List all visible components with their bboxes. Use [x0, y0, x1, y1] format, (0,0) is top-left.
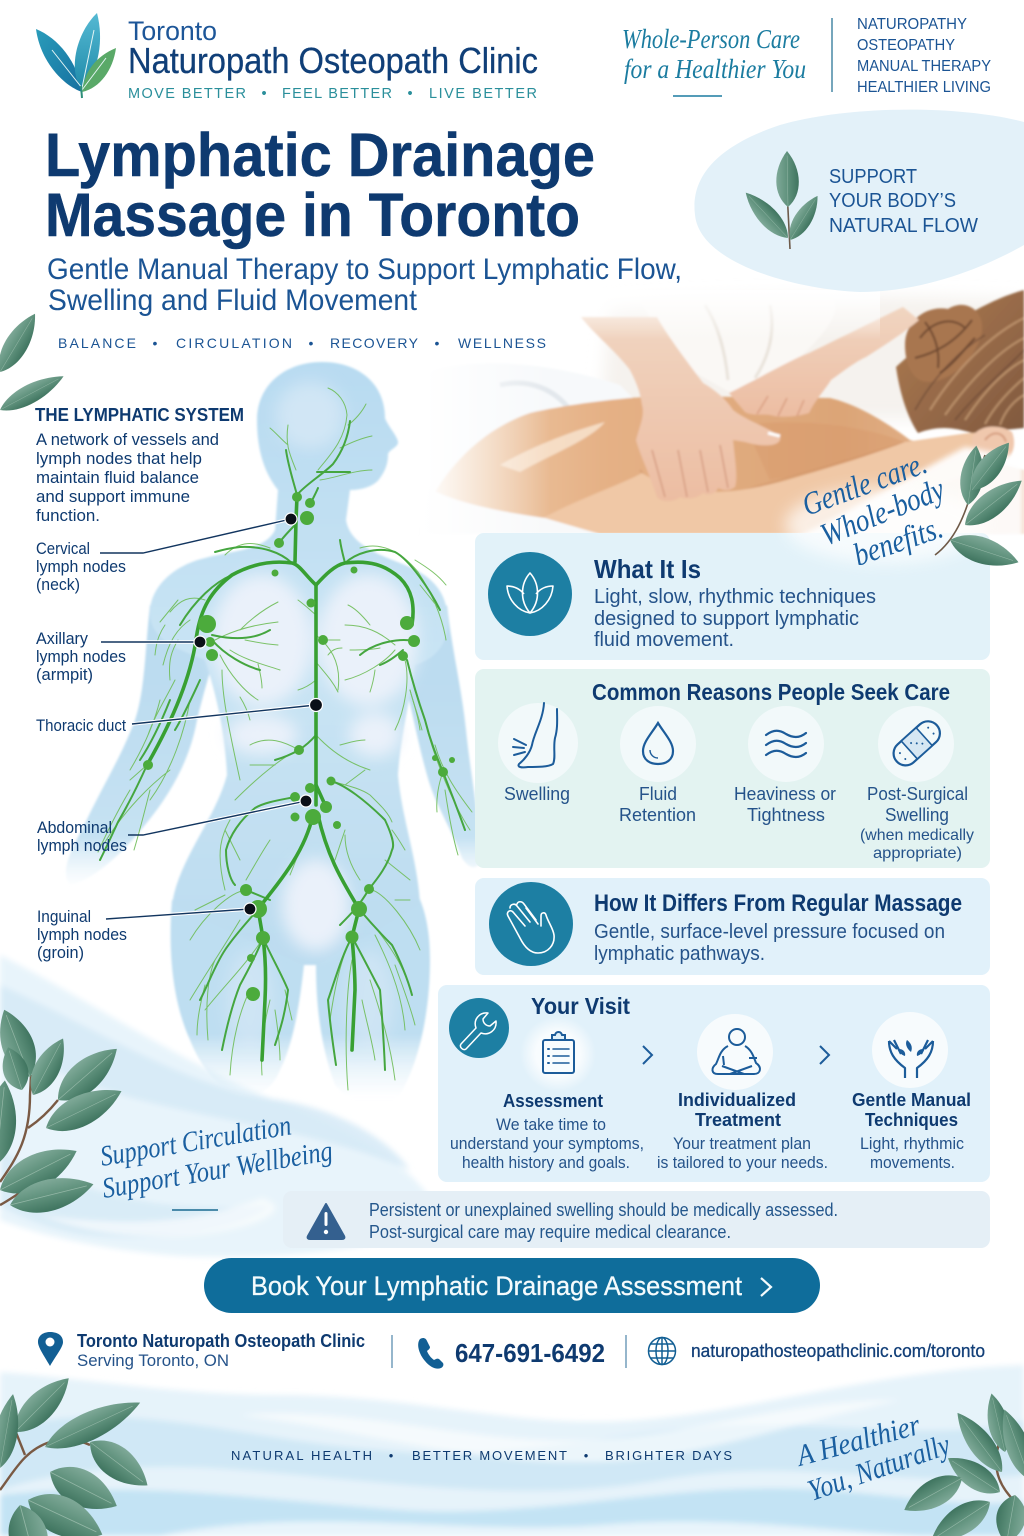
title: Massage in Toronto [45, 181, 580, 249]
keyword strip: CIRCULATION [176, 335, 292, 351]
lymphatic system intro: maintain fluid balance [36, 468, 199, 487]
panel: what it is [475, 533, 990, 660]
icon: bandage [878, 706, 954, 782]
heading: Your Visit [531, 993, 630, 1019]
top-left leaves [0, 308, 68, 418]
label: inguinal [37, 908, 127, 962]
panel: how it differs [475, 878, 990, 975]
label: abdominal: Abdominal [37, 819, 112, 837]
background wave: lower left [0, 955, 440, 1257]
label: cervical: Cervical [36, 540, 90, 558]
logo [36, 13, 538, 102]
arrow [820, 1046, 829, 1064]
body text [594, 586, 876, 651]
label: post-surgical: Post-Surgical [867, 783, 968, 804]
script text: Gentle care. [797, 444, 932, 523]
illustration: footer left leaves [0, 1368, 157, 1536]
illustration: lower-left leaf branch [0, 1004, 128, 1220]
header tagline script [622, 24, 806, 96]
keyword strip: BALANCE [58, 335, 136, 351]
caution text: Persistent or unexplained swelling should be medically assessed. [369, 1200, 838, 1220]
button: book assessment: Book Your Lymphatic Drainage Assessment [251, 1271, 742, 1301]
label: axillary: lymph nodes [36, 648, 126, 666]
title [45, 121, 595, 249]
contact: address: Serving Toronto, ON [77, 1352, 229, 1370]
callout dots [194, 513, 322, 915]
keyword strip: • [153, 335, 158, 351]
label: thoracic duct: Thoracic duct [36, 717, 126, 735]
script callout: a healthier you: A Healthier [792, 1408, 924, 1473]
icon: foot swelling [498, 703, 578, 783]
keyword strip: • [435, 335, 440, 351]
clinic city: Toronto [128, 16, 217, 46]
label: fluid retention: Retention [619, 804, 696, 825]
icon: clipboard [520, 1016, 596, 1092]
label: cervical: lymph nodes [36, 558, 126, 576]
contact: website: naturopathosteopathclinic.com/toronto [691, 1341, 985, 1361]
logo tagline [128, 86, 537, 102]
step: assessment [450, 1016, 644, 1172]
logo tagline: FEEL BETTER [282, 86, 392, 102]
label: axillary [36, 630, 126, 684]
services list: MANUAL THERAPY [857, 58, 991, 75]
step: individualized treatment: Individualized [678, 1090, 796, 1110]
step: gentle manual techniques: Light, rhythmic [860, 1135, 964, 1153]
step: gentle manual techniques: Techniques [865, 1110, 958, 1130]
logo tagline: MOVE BETTER [128, 86, 246, 102]
fine vessels [98, 388, 472, 1090]
keyword strip [58, 335, 546, 351]
step: assessment: Assessment [503, 1091, 603, 1111]
contact: phone: 647-691-6492 [455, 1338, 605, 1368]
panel: medical caution [283, 1191, 990, 1248]
label: cervical: (neck) [36, 576, 80, 594]
callout lines [100, 519, 316, 919]
lymphatic system intro [35, 405, 244, 525]
caution text: Post-surgical care may require medical clearance. [369, 1222, 731, 1242]
body text: lymphatic pathways. [594, 943, 765, 965]
label: fluid retention: Fluid [639, 783, 677, 804]
step: individualized treatment: is tailored to your needs. [657, 1154, 828, 1172]
body text: Gentle, surface-level pressure focused on [594, 921, 945, 943]
script callout: support circulation: Support Circulation [98, 1109, 294, 1173]
patient arm [520, 432, 1000, 534]
lymphatic system intro: THE LYMPHATIC SYSTEM [35, 405, 244, 425]
logo tagline: • [407, 86, 413, 102]
services list: HEALTHIER LIVING [857, 79, 991, 96]
chart: lymphatic system body diagram [66, 362, 482, 1104]
label: cervical [36, 540, 126, 594]
towel [430, 363, 640, 500]
body text: designed to support lymphatic [594, 608, 859, 630]
footer tagline: • [389, 1448, 394, 1463]
label: inguinal: Inguinal [37, 908, 91, 926]
body text [594, 921, 945, 965]
icon: leaf sprig [739, 151, 825, 249]
heading: How It Differs From Regular Massage [594, 890, 962, 917]
label: axillary: Axillary [36, 630, 89, 648]
logo tagline: LIVE BETTER [429, 86, 537, 102]
step: assessment: understand your symptoms, [450, 1135, 644, 1153]
keyword strip: RECOVERY [330, 335, 419, 351]
lymphatic system intro: A network of vessels and [36, 430, 219, 449]
lymphatic system intro: lymph nodes that help [36, 449, 202, 468]
therapist left arm and hand [581, 317, 780, 501]
photo fade overlays [420, 280, 550, 536]
arrow [643, 1046, 652, 1064]
label: abdominal: lymph nodes [37, 837, 127, 855]
icon: waves [748, 706, 824, 782]
body silhouette [66, 362, 482, 1104]
lymph nodes [143, 492, 455, 1001]
label: swelling: Swelling [504, 783, 570, 804]
background waves: footer [0, 1365, 1024, 1536]
body highlights [212, 381, 418, 1050]
step: gentle manual techniques [852, 1012, 971, 1172]
label: post-surgical: appropriate) [873, 845, 962, 862]
hair [896, 290, 1024, 433]
hero photo: massage [420, 280, 1024, 540]
therapist shirt [640, 293, 835, 395]
support badge blob [694, 110, 1024, 292]
script callout: support circulation [98, 1109, 335, 1210]
footer tagline: • [584, 1448, 589, 1463]
step: gentle manual techniques: movements. [870, 1154, 955, 1172]
script callout: support circulation: Support Your Wellbeing [100, 1135, 335, 1205]
footer tagline: NATURAL HEALTH [231, 1448, 372, 1463]
label: heaviness: Tightness [747, 804, 825, 825]
services list [857, 16, 991, 96]
ear [972, 427, 1014, 462]
step: individualized treatment: Treatment [695, 1110, 781, 1130]
keyword strip: • [309, 335, 314, 351]
script text [797, 444, 950, 573]
step: gentle manual techniques: Gentle Manual [852, 1090, 971, 1110]
header tagline script: for a Healthier You [624, 54, 806, 84]
icon: logo leaves [36, 13, 116, 98]
contact: website [648, 1338, 985, 1364]
panel: common reasons [475, 669, 990, 868]
body text: Light, slow, rhythmic techniques [594, 586, 876, 608]
script text: benefits. [849, 509, 947, 573]
footer tagline [231, 1448, 732, 1463]
label: inguinal: lymph nodes [37, 926, 127, 944]
label: post-surgical: (when medically [860, 827, 974, 844]
step: assessment: We take time to [496, 1116, 606, 1134]
heading: What It Is [594, 554, 701, 584]
label: axillary: (armpit) [36, 666, 93, 684]
subtitle [47, 253, 682, 317]
main vessels [147, 497, 413, 1060]
header tagline script: Whole-Person Care [622, 24, 800, 54]
icon: globe [648, 1338, 676, 1364]
step: individualized treatment [657, 1014, 828, 1172]
subtitle: Gentle Manual Therapy to Support Lymphatic Flow, [47, 253, 682, 286]
badge text: NATURAL FLOW [829, 215, 978, 237]
services list: OSTEOPATHY [857, 37, 955, 54]
label: heaviness [734, 783, 836, 825]
icon: lotus [488, 552, 572, 636]
label: abdominal [37, 819, 127, 855]
label: heaviness: Heaviness or [734, 783, 836, 804]
step: assessment: health history and goals. [462, 1154, 630, 1172]
icon: wrench [449, 998, 509, 1058]
icon: map pin [38, 1332, 63, 1366]
studio background [600, 297, 1024, 420]
icon: seated person [697, 1014, 773, 1090]
label: fluid retention [619, 783, 696, 825]
services list: NATUROPATHY [857, 16, 967, 33]
footer tagline: BRIGHTER DAYS [605, 1448, 732, 1463]
contact: address: Toronto Naturopath Osteopath Clinic [77, 1331, 365, 1351]
title: Lymphatic Drainage [45, 121, 595, 189]
panel: your visit [438, 985, 990, 1182]
footer tagline: BETTER MOVEMENT [412, 1448, 567, 1463]
lymphatic system intro: and support immune [36, 487, 190, 506]
script callout: a healthier you: You, Naturally [804, 1428, 955, 1508]
medium vessels [100, 421, 465, 1070]
therapist right arm and hand [729, 307, 919, 417]
button: book assessment [204, 1258, 820, 1313]
clinic name: Naturopath Osteopath Clinic [128, 40, 538, 81]
body text: fluid movement. [594, 629, 734, 651]
icon: leaf branch [935, 436, 1024, 575]
patient back [420, 396, 1024, 534]
label: inguinal: (groin) [37, 944, 84, 962]
badge text: YOUR BODY’S [829, 190, 956, 212]
icon: drop [620, 706, 696, 782]
step: individualized treatment: Your treatment plan [673, 1135, 811, 1153]
script callout: gentle care with leaves [785, 436, 1024, 575]
script text: Whole-body [815, 470, 950, 552]
contact: address [38, 1331, 365, 1370]
icon: phone [418, 1338, 443, 1369]
lymphatic system intro: function. [36, 506, 100, 525]
logo tagline: • [261, 86, 267, 102]
subtitle: Swelling and Fluid Movement [48, 284, 417, 317]
keyword strip: WELLNESS [458, 335, 546, 351]
heading: Common Reasons People Seek Care [592, 679, 950, 705]
badge text: SUPPORT [829, 166, 917, 188]
illustration: footer right leaves [898, 1391, 1024, 1536]
label: post-surgical [860, 783, 974, 862]
icon: hand [489, 882, 573, 966]
icon: warning triangle [308, 1204, 344, 1239]
label: post-surgical: Swelling [885, 804, 949, 825]
icon: hands with leaves [872, 1012, 948, 1088]
badge text [829, 166, 978, 237]
caution text [369, 1200, 838, 1242]
